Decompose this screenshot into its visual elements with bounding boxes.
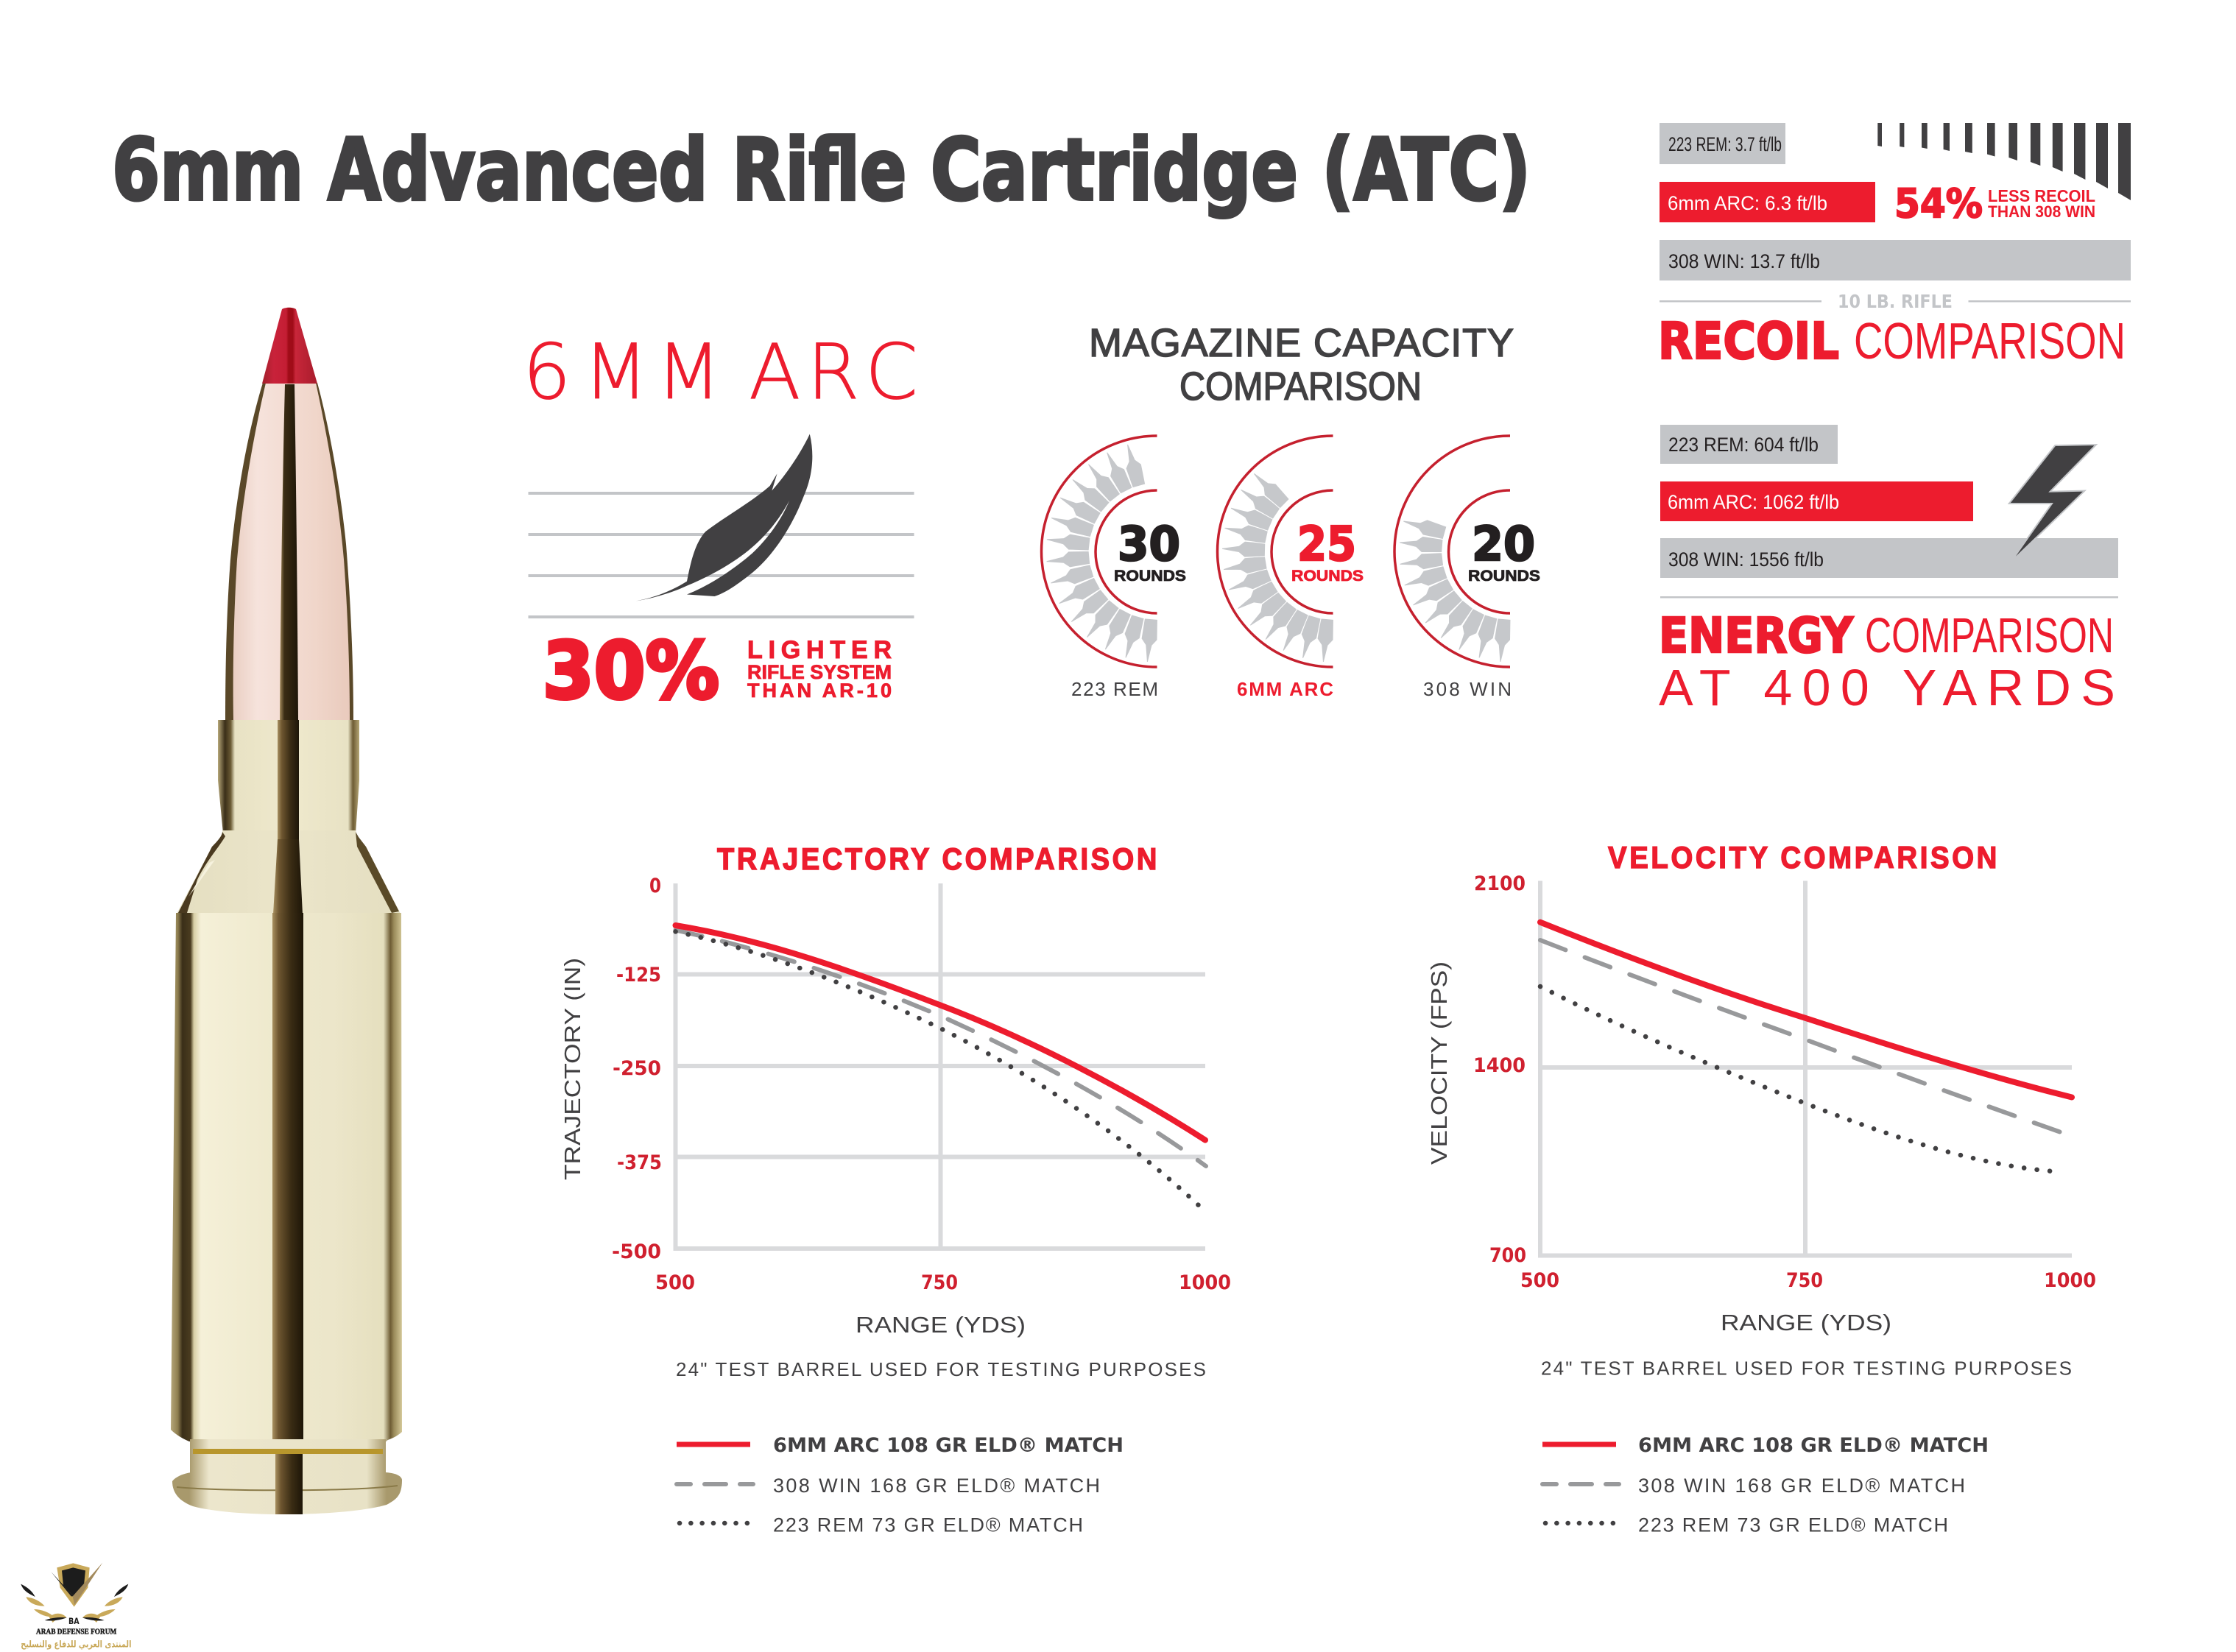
heading: energy comparison: COMPARISON — [1865, 608, 2114, 663]
gauge: 6mm ARC 25 rounds: 6MM ARC — [1237, 678, 1333, 700]
logo wings — [21, 1584, 128, 1623]
legend: 308 WIN 168 GR ELD® MATCH — [773, 1475, 1100, 1497]
bar: 223 REM — [1660, 425, 1838, 464]
gauge: 308 WIN 20 rounds — [1394, 436, 1540, 700]
rifle weight note: 10 LB. RIFLE — [1838, 291, 1953, 312]
panel: velocity chart — [1426, 840, 2096, 1536]
x axis labels — [1520, 1269, 2096, 1292]
bullet jacket — [225, 383, 353, 721]
bar: 308 WIN — [1660, 240, 2131, 280]
title: 6mm Advanced Rifle Cartridge (ATC) — [112, 121, 1531, 220]
gauge: 6mm ARC 25 rounds — [1218, 436, 1364, 700]
case rim — [172, 1454, 402, 1514]
test barrel note: 24" TEST BARREL USED FOR TESTING PURPOSES — [1541, 1358, 2072, 1380]
stat: 54% less recoil — [1894, 180, 2095, 227]
y axis labels: -250 — [613, 1057, 661, 1080]
x axis labels — [655, 1271, 1231, 1294]
cartridge photo — [171, 308, 402, 1514]
y axis labels: 2100 — [1474, 872, 1526, 895]
divider — [1660, 596, 2118, 598]
gauge: 308 WIN 20 rounds: ROUNDS — [1468, 568, 1540, 585]
heading: recoil comparison: RECOIL — [1658, 312, 1839, 371]
x axis title: RANGE (YDS) — [856, 1312, 1026, 1338]
stat caption: RIFLE SYSTEM — [747, 661, 892, 683]
logo: Arab Defense Forum — [21, 1563, 131, 1650]
bar: 6mm ARC: 6mm ARC: 1062 ft/lb — [1668, 491, 1839, 513]
legend: 223 REM 73 GR ELD® MATCH — [1638, 1514, 1948, 1536]
stat: 54% less recoil: LESS RECOIL — [1988, 186, 2095, 205]
legend — [1542, 1434, 1989, 1536]
y axis labels: 0 — [649, 875, 661, 897]
bar: 6mm ARC — [1660, 182, 1875, 222]
curve: 308 WIN — [676, 931, 1206, 1166]
heading: COMPARISON — [1179, 364, 1422, 409]
y axis labels: -125 — [616, 964, 661, 986]
y axis labels: -375 — [617, 1151, 662, 1174]
stat: 54% less recoil: 54% — [1894, 180, 1983, 227]
icon: recoil ticks — [1877, 123, 2131, 200]
legend — [677, 1434, 1124, 1536]
gauge: 6mm ARC 25 rounds: ROUNDS — [1291, 568, 1364, 585]
x axis labels: 500 — [1520, 1269, 1559, 1292]
heading: 6MM ARC: 6MMARC — [523, 328, 918, 417]
logo shield — [51, 1563, 102, 1607]
x axis labels: 1000 — [1179, 1271, 1231, 1294]
logo text — [21, 1616, 131, 1650]
y axis labels — [612, 875, 662, 1263]
y axis labels: 1400 — [1473, 1054, 1526, 1077]
bar: 223 REM — [1660, 123, 1785, 164]
panel: magazine capacity comparison — [1041, 321, 1540, 700]
y axis labels: -500 — [612, 1240, 661, 1263]
gauge: 223 REM 30 rounds: ROUNDS — [1114, 568, 1186, 585]
heading: energy comparison — [1659, 607, 2114, 664]
bar: 223 REM: 223 REM: 3.7 ft/lb — [1668, 133, 1782, 155]
gauge: 308 WIN 20 rounds: 20 — [1472, 518, 1535, 572]
heading: recoil comparison — [1658, 312, 2126, 371]
bar: 6mm ARC: 6mm ARC: 6.3 ft/lb — [1668, 192, 1827, 214]
stat caption — [747, 636, 892, 702]
stat: 54% less recoil: THAN 308 WIN — [1988, 202, 2095, 221]
panel: recoil comparison — [1658, 123, 2131, 371]
gauge: 6mm ARC 25 rounds: 25 — [1297, 518, 1356, 572]
x axis labels: 1000 — [2044, 1269, 2096, 1292]
gauge: 308 WIN 20 rounds: 308 WIN — [1423, 678, 1512, 700]
case body — [171, 720, 402, 1443]
chart title: TRAJECTORY COMPARISON — [717, 841, 1160, 876]
x axis labels: 500 — [655, 1271, 695, 1294]
panel: trajectory chart — [560, 841, 1231, 1536]
legend: 308 WIN 168 GR ELD® MATCH — [1638, 1475, 1965, 1497]
curve: 308 WIN — [1540, 940, 2067, 1134]
curve: 6mm ARC — [1540, 922, 2072, 1097]
x axis title: RANGE (YDS) — [1721, 1310, 1891, 1335]
y axis title: VELOCITY (FPS) — [1426, 961, 1452, 1165]
polymer tip — [262, 308, 317, 384]
case neck — [218, 720, 359, 833]
legend: 6MM ARC 108 GR ELD® MATCH — [773, 1434, 1124, 1457]
heading: MAGAZINE CAPACITY — [1089, 321, 1514, 365]
panel: 6mm ARC lighter system — [523, 328, 918, 716]
test barrel note: 24" TEST BARREL USED FOR TESTING PURPOSES — [676, 1358, 1206, 1380]
chart title: VELOCITY COMPARISON — [1608, 840, 2000, 875]
heading: recoil comparison: COMPARISON — [1854, 312, 2126, 370]
stat caption: THAN AR-10 — [747, 679, 892, 702]
gridlines — [673, 883, 1205, 1251]
logo text: المنتدى العربي للدفاع والتسليح — [21, 1639, 131, 1650]
logo text: BA — [68, 1616, 80, 1626]
gauge: 223 REM 30 rounds: 223 REM — [1071, 678, 1158, 700]
y axis title: TRAJECTORY (IN) — [560, 958, 585, 1180]
gridlines — [1538, 880, 2072, 1257]
stat caption: LIGHTER — [747, 636, 892, 664]
heading — [1089, 321, 1514, 409]
curve: 6mm ARC — [676, 925, 1205, 1140]
subheading: at 400 yards: AT 400 YARDS — [1659, 659, 2115, 716]
bar: 223 REM: 223 REM: 604 ft/lb — [1668, 434, 1819, 456]
panel: energy comparison — [1659, 425, 2118, 716]
logo text: ARAB DEFENSE FORUM — [36, 1628, 116, 1636]
bar: 308 WIN: 308 WIN: 13.7 ft/lb — [1668, 250, 1820, 272]
heading: energy comparison: ENERGY — [1659, 607, 1854, 664]
scale lines — [529, 492, 914, 618]
bar: 308 WIN: 308 WIN: 1556 ft/lb — [1668, 548, 1824, 571]
y axis labels — [1473, 872, 1526, 1267]
legend: 6MM ARC 108 GR ELD® MATCH — [1638, 1434, 1989, 1457]
icon: feather — [636, 434, 812, 601]
x axis labels: 750 — [1786, 1269, 1823, 1292]
legend: 223 REM 73 GR ELD® MATCH — [773, 1514, 1083, 1536]
stat: 30%: 30% — [543, 626, 719, 716]
curve: 223 REM — [1540, 986, 2062, 1172]
gauge: 223 REM 30 rounds: 30 — [1118, 518, 1180, 572]
y axis labels: 700 — [1489, 1244, 1526, 1267]
icon: lightning bolt — [2009, 445, 2096, 562]
gauge: 223 REM 30 rounds — [1041, 436, 1186, 700]
bar: 6mm ARC — [1660, 481, 1973, 521]
extractor groove — [190, 1439, 386, 1476]
curve: 223 REM — [676, 931, 1201, 1207]
x axis labels: 750 — [921, 1271, 958, 1294]
bar: 308 WIN — [1660, 538, 2118, 578]
